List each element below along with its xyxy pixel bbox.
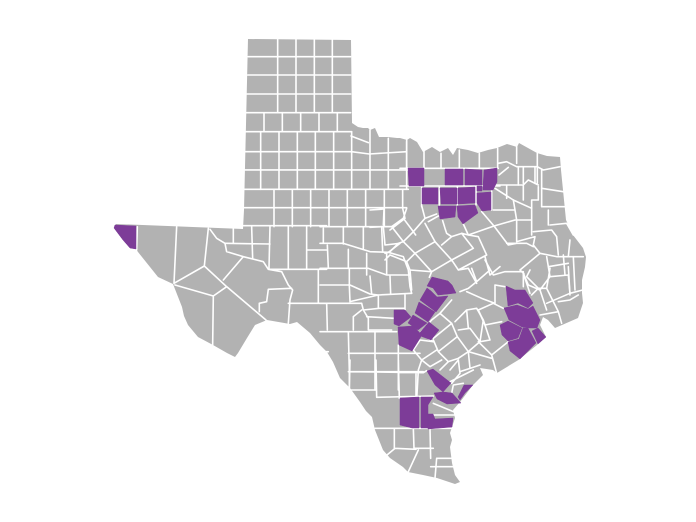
highlighted counties: houston area [500, 286, 546, 359]
county borders: central texas south part [413, 300, 492, 400]
county borders: central texas north part [370, 206, 500, 290]
county borders: central texas west part [320, 227, 423, 390]
state outline [114, 39, 586, 484]
county borders: north and east texas [400, 140, 583, 310]
county borders: south texas [349, 360, 473, 478]
highlighted counties: dallas fort worth [408, 168, 497, 224]
highlighted counties: austin san antonio corridor [394, 277, 456, 351]
county borders: gulf coast [460, 260, 578, 373]
county borders: trans-pecos and edwards plateau [137, 226, 327, 345]
highlighted counties: far west [114, 225, 136, 249]
highlighted counties: corpus christi area [400, 369, 473, 429]
county borders: panhandle and rolling plains [243, 39, 408, 230]
